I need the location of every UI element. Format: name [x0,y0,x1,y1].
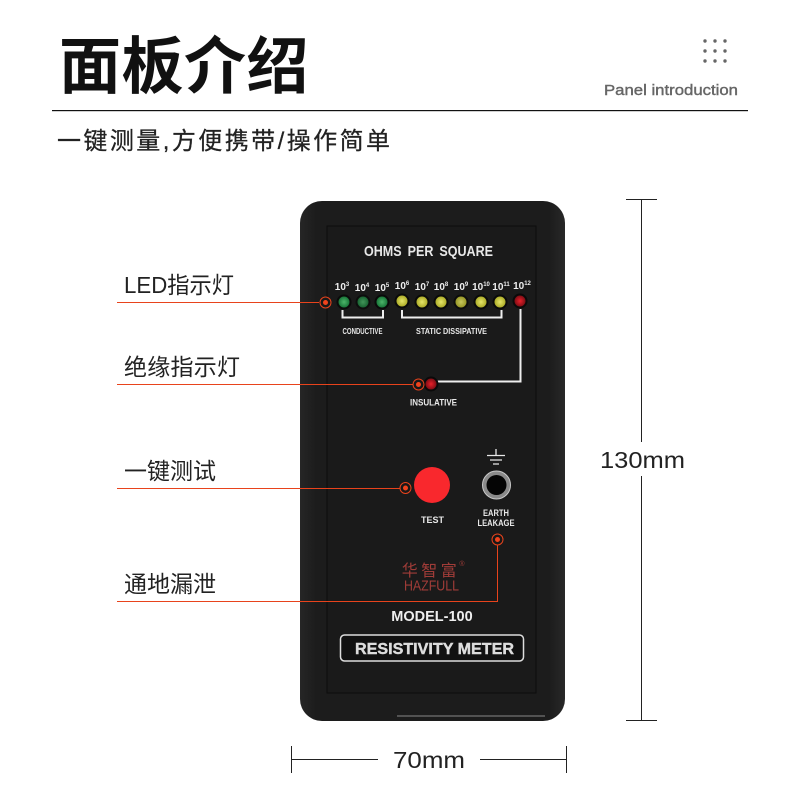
test label: TEST [421,515,444,525]
callout: insulation indicator: 绝缘指示灯 [124,354,240,380]
range labels [342,326,487,408]
scale labels: 9 [465,282,469,288]
scale labels: 10 [483,282,491,288]
earth leakage label [478,508,514,528]
tagline: 一键测量,方便携带/操作简单 [57,128,390,155]
scale labels: 4 [366,283,370,289]
scale labels: 10 [472,282,483,293]
scale labels: 10 [434,282,445,293]
range labels: CONDUCTIVE [342,326,383,336]
range labels: INSULATIVE [410,398,457,408]
dimension: width 70mm: 70mm [393,747,465,773]
scale labels: 5 [386,283,390,289]
earth leakage label: LEAKAGE [478,518,514,528]
dimension: width 70mm [292,746,566,773]
title: 面板介绍 [59,33,309,102]
test button [414,467,450,503]
brand logo: ® [459,560,465,568]
earth leakage label: EARTH [483,508,509,518]
brand logo: 华智富 [402,562,460,580]
scale labels: 6 [406,281,410,287]
english subtitle: Panel introduction [604,82,738,99]
device body [300,201,565,721]
brand logo: HAZFULL [404,578,459,594]
brand logo [402,560,465,594]
scale labels: 10 [355,283,366,294]
scale labels: 8 [445,282,449,288]
scale labels: 10 [492,282,503,293]
callout: one-touch test [117,458,411,494]
callout: insulation indicator [117,354,424,390]
scale labels: 7 [426,282,430,288]
scale labels: 10 [513,281,524,292]
icon: dot grid [703,39,727,63]
scale labels: 10 [415,282,426,293]
earth jack [482,471,510,499]
scale labels: 10 [375,283,386,294]
nameplate: RESISTIVITY METER [355,641,514,658]
scale labels: 10 [454,282,465,293]
range labels: STATIC DISSIPATIVE [416,326,487,336]
device: resistivity meter [300,201,565,721]
ground symbol [487,449,505,464]
scale labels [335,281,532,294]
callout: one-touch test: 一键测试 [124,458,216,484]
nameplate [340,635,524,661]
dimension: height 130mm [600,200,685,720]
scale labels: 11 [503,282,510,288]
model number: MODEL-100 [391,609,473,625]
callout: LED indicator: LED指示灯 [124,272,234,298]
insulative LED [424,378,438,390]
LED row [338,294,526,308]
scale labels: 10 [395,281,406,292]
header rule [52,110,748,111]
scale labels: 10 [335,282,346,293]
scale labels: 3 [346,282,350,288]
callout: earth leakage: 通地漏泄 [124,571,216,597]
scale labels: 12 [524,281,532,287]
dimension: height 130mm: 130mm [600,447,685,473]
callout: LED indicator [117,272,331,308]
device bottom highlight [397,715,545,717]
range brackets [342,309,520,382]
panel heading: OHMS PER SQUARE [364,243,493,260]
face panel [327,226,536,693]
callout: earth leakage [117,534,503,602]
